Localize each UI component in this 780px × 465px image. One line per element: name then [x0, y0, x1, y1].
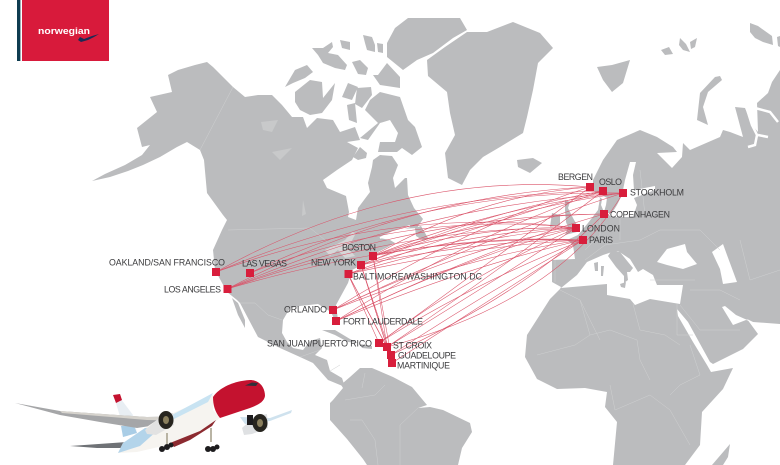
city labels: BERGEN	[558, 172, 593, 182]
sea: Persian Gulf	[722, 306, 753, 325]
routes: Caribbean to Europe	[379, 187, 623, 363]
land: Great Britain and Ireland	[550, 200, 578, 235]
city labels: LOS ANGELES	[164, 284, 221, 294]
land: Svalbard	[597, 60, 630, 92]
city labels: COPENHAGEN	[610, 210, 670, 220]
land: Severnaya Zemlya	[750, 23, 780, 47]
plane right engine	[242, 414, 268, 435]
plane fuselage	[118, 395, 220, 453]
land: Italy and Mediterranean islands	[594, 250, 633, 288]
plane left wing	[15, 403, 195, 428]
city labels	[109, 172, 684, 370]
city labels: OSLO	[599, 177, 622, 187]
routes: US east coast to Europe	[348, 187, 623, 274]
sea: Caspian	[712, 244, 737, 284]
land: North and Central America	[92, 62, 423, 387]
plane landing gear	[159, 415, 253, 452]
city labels: OAKLAND/SAN FRANCISCO	[109, 258, 225, 268]
city labels: LONDON	[582, 224, 620, 234]
flight routes	[216, 185, 623, 363]
land: Baja California	[232, 298, 245, 328]
city labels: BOSTON	[342, 242, 376, 252]
land: Newfoundland	[415, 226, 428, 241]
sea: Baltic and Gulf of Finland	[595, 162, 655, 217]
city labels: ORLANDO	[284, 304, 327, 314]
land: Eurasia and Africa	[525, 70, 780, 465]
city labels: NEW YORK	[311, 258, 356, 268]
sea: Mediterranean	[561, 251, 683, 305]
plane horizontal stabiliser	[70, 442, 127, 448]
land: Franz Josef Land	[661, 38, 697, 55]
city labels: STOCKHOLM	[630, 188, 684, 198]
Canadian lakes	[261, 120, 306, 216]
land: Arctic Canada islands	[285, 18, 467, 160]
plane far wing	[240, 410, 292, 424]
airplane: Norwegian 787	[15, 380, 292, 453]
city labels: FORT LAUDERDALE	[343, 316, 423, 326]
routes: Florida to Europe	[333, 187, 623, 321]
land: Greenland	[427, 22, 553, 185]
city labels: GUADELOUPE	[398, 350, 456, 360]
land: Novaya Zemlya	[697, 76, 722, 125]
land: Madagascar	[712, 444, 730, 465]
city markers	[212, 183, 627, 367]
Great Lakes	[325, 232, 356, 258]
city labels: MARTINIQUE	[397, 360, 450, 370]
routes: US east coast to Caribbean	[348, 256, 392, 363]
land: Iceland	[517, 158, 542, 173]
land: South America	[330, 368, 472, 465]
sea: Black Sea	[657, 244, 697, 269]
sea: Arctic river gulfs	[746, 106, 778, 147]
city labels: SAN JUAN/PUERTO RICO	[267, 338, 372, 348]
city labels: LAS VEGAS	[242, 258, 287, 268]
logo: Norwegian	[17, 0, 109, 61]
city labels: BALTIMORE/WASHINGTON DC	[353, 272, 483, 282]
plane tail fin	[115, 399, 137, 437]
city labels: ST CROIX	[393, 340, 432, 350]
city labels: PARIS	[589, 235, 613, 245]
logo: Norwegian: norwegian	[38, 26, 90, 36]
sea: Gulf of St Lawrence	[380, 226, 410, 238]
plane left engine	[145, 413, 174, 435]
plane red nose	[213, 380, 265, 418]
national borders	[200, 87, 780, 465]
routes: US west coast to Europe	[216, 185, 623, 289]
land: Cuba and Hispaniola	[322, 330, 372, 349]
